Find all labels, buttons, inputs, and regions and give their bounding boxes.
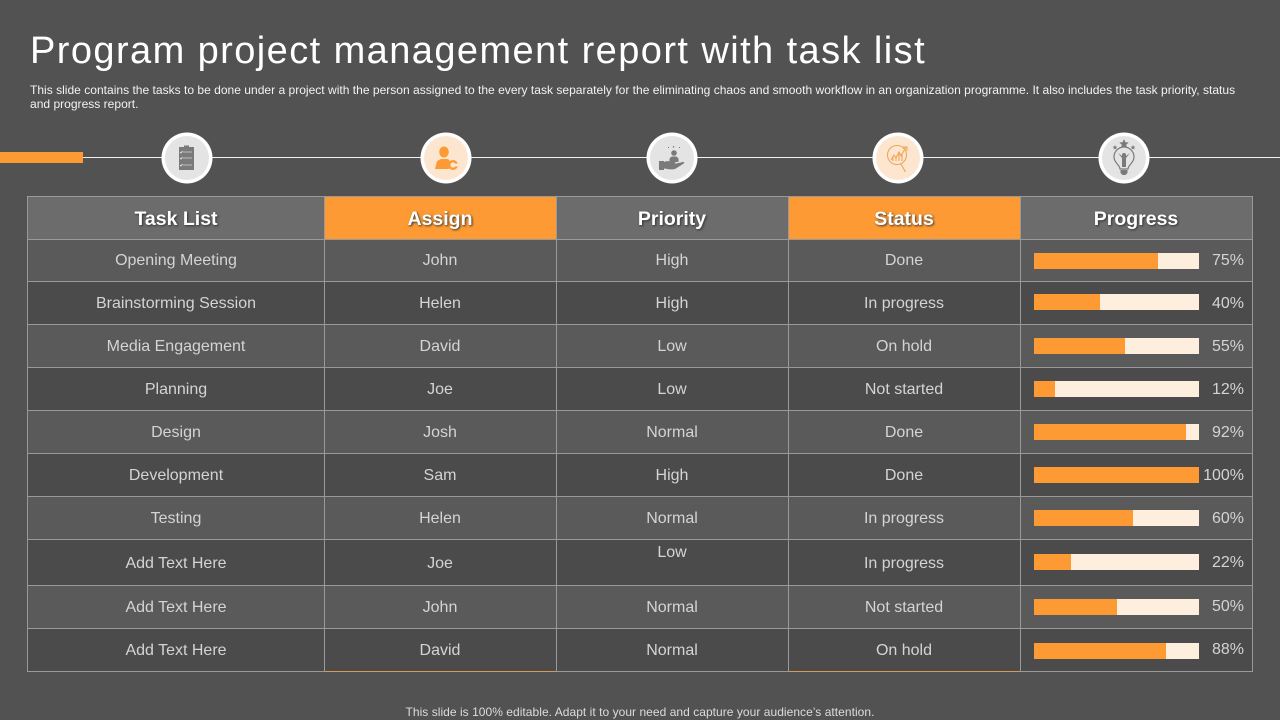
row: Design: Done: [885, 424, 923, 440]
row: Planning: 12%: [1212, 381, 1244, 398]
icon: progress light bulb: [1098, 132, 1150, 184]
footer note: This slide is 100% editable. Adapt it to your need and capture your audience’s attention.: [406, 705, 874, 719]
header cell: Assign: [324, 196, 556, 239]
row: Media Engagement: Low: [657, 338, 687, 354]
header cell: Status: [788, 196, 1020, 239]
row: Development: High: [656, 466, 688, 484]
title: Program project management report with task list: [30, 30, 926, 72]
row: Add Text Here (John): Normal: [646, 598, 698, 616]
row: Testing: In progress: [864, 510, 944, 526]
row: Media Engagement: Media Engagement: [107, 338, 245, 354]
row: Opening Meeting: John: [423, 252, 457, 269]
row: Add Text Here (Joe): Joe: [427, 555, 453, 572]
row: Brainstorming Session: [28, 281, 1252, 324]
row: Add Text Here (Joe): 22%: [1212, 554, 1244, 571]
header cell: Task List: Task List: [134, 208, 218, 230]
row: Design: [28, 410, 1252, 453]
orange accent bar: [0, 152, 83, 163]
row: Brainstorming Session: 40%: [1212, 295, 1244, 312]
row: Testing: Normal: [646, 510, 698, 526]
row: Planning: Low: [657, 380, 687, 398]
row: Testing: Helen: [419, 510, 461, 526]
description text: This slide contains the tasks to be done under a project with the person assigned to the every task separately for the eliminating chaos and smooth workflow in an organization programme. It also includes the task priority, status and progress report.: [30, 83, 1235, 111]
row: Add Text Here (John): [28, 585, 1252, 628]
icon: status magnifier chart: [872, 132, 924, 184]
row: Add Text Here (David): [28, 628, 1252, 671]
row: Design: Design: [151, 424, 201, 440]
row: Add Text Here (Joe): [28, 539, 1252, 585]
icon: task list clipboard: [162, 132, 212, 184]
row: Planning: Joe: [427, 380, 453, 398]
row: Opening Meeting: 75%: [1212, 252, 1244, 269]
row: Add Text Here (John): Add Text Here: [125, 598, 227, 616]
row: Development: 100%: [1203, 467, 1244, 484]
header cell: Task List: [28, 196, 324, 239]
row: Add Text Here (David): On hold: [876, 642, 932, 658]
row: Planning: [28, 367, 1252, 410]
row: Development: Sam: [424, 466, 456, 484]
row: Add Text Here (David): 88%: [1212, 641, 1244, 658]
row: Brainstorming Session: Helen: [419, 294, 461, 312]
header cell: Assign: Assign: [407, 208, 472, 230]
header cell: Priority: Priority: [638, 208, 706, 230]
row: Opening Meeting: Opening Meeting: [115, 252, 237, 269]
header cell: Priority: [556, 196, 788, 239]
icon: assign person: [420, 132, 472, 184]
icon: priority hand with person: [646, 132, 698, 184]
row: Add Text Here (John): Not started: [865, 598, 943, 616]
row: Opening Meeting: High: [656, 252, 688, 269]
row: Opening Meeting: Done: [885, 252, 923, 269]
row: Planning: Planning: [145, 380, 207, 398]
row: Add Text Here (Joe): Add Text Here: [125, 555, 227, 572]
row: Media Engagement: [28, 324, 1252, 367]
row: Add Text Here (David): Add Text Here: [125, 642, 227, 658]
row: Design: Normal: [646, 424, 698, 440]
row: Opening Meeting: [28, 239, 1252, 281]
row: Add Text Here (David): David: [420, 642, 460, 658]
row: Brainstorming Session: In progress: [864, 294, 944, 312]
row: Add Text Here (David): Normal: [646, 642, 698, 658]
row: Add Text Here (John): John: [423, 598, 457, 616]
row: Testing: [28, 496, 1252, 539]
row: Development: Done: [885, 466, 923, 484]
header cell: Progress: Progress: [1094, 208, 1178, 230]
row: Add Text Here (Joe): In progress: [864, 555, 944, 572]
row: Development: [28, 453, 1252, 496]
row: Testing: Testing: [151, 510, 201, 526]
row: Add Text Here (Joe): Low: [657, 544, 687, 561]
row: Media Engagement: 55%: [1212, 338, 1244, 355]
row: Development: Development: [129, 466, 223, 484]
row: Add Text Here (John): 50%: [1212, 598, 1244, 615]
row: Media Engagement: On hold: [876, 338, 932, 354]
timeline connector line: [83, 157, 1280, 158]
header cell: Status: Status: [874, 208, 934, 230]
row: Testing: 60%: [1212, 510, 1244, 527]
row: Brainstorming Session: High: [656, 294, 688, 312]
row: Design: Josh: [423, 424, 457, 440]
row: Design: 92%: [1212, 424, 1244, 441]
header cell: Progress: [1020, 196, 1252, 239]
row: Media Engagement: David: [420, 338, 460, 354]
row: Planning: Not started: [865, 380, 943, 398]
row: Brainstorming Session: Brainstorming Session: [96, 294, 256, 312]
